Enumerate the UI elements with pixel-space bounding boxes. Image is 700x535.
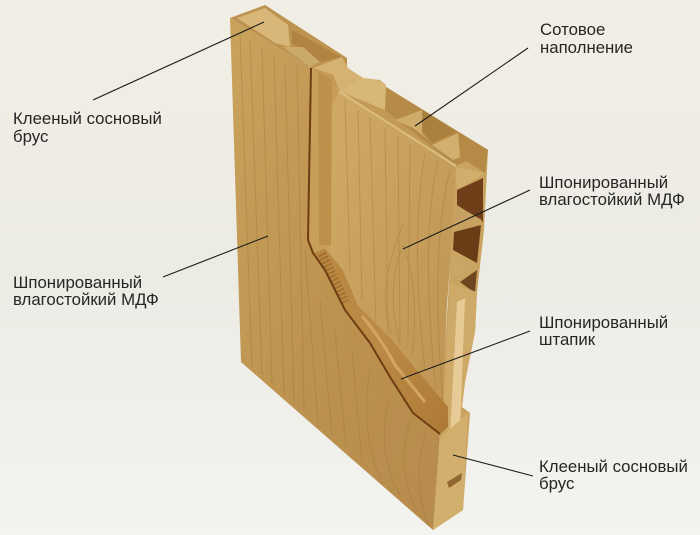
left panel grain [240,35,428,525]
label: honeycomb filling: Сотовое [540,20,605,39]
label: glued pine bar, right: брус [539,474,574,493]
bead highlight [362,316,425,402]
label: veneered MDF, right: Шпонированный [539,173,668,192]
label: veneered MDF, right: влагостойкий МДФ [539,190,685,209]
bead vertical section [308,68,340,253]
door edge: right side [433,133,488,530]
label: glued pine bar, left: Клееный сосновый [13,109,162,128]
door edge base filling [311,68,488,166]
veneered MDF right panel [323,92,456,427]
label: veneered MDF, left: Шпонированный [13,273,142,292]
door cross-section [230,5,488,530]
pine bar side lower [443,283,477,435]
veneered glazing bead [313,248,448,434]
leader lines [93,22,533,476]
upper panel edge highlight [340,92,456,166]
label: veneered MDF, left: влагостойкий МДФ [13,290,159,309]
bead ribbed pine part [322,254,345,302]
label: veneered bead: Шпонированный [539,313,668,332]
label: honeycomb filling: наполнение [540,38,633,57]
honeycomb cells [455,167,485,190]
pine bar connection [313,57,386,110]
dark shadow groove [308,68,440,434]
right panel grain [345,100,450,400]
honeycomb filling top [385,87,488,166]
veneered MDF left panel [230,18,440,530]
label: glued pine bar, right: Клееный сосновый [539,457,688,476]
label: glued pine bar, left: брус [13,127,48,146]
label: veneered bead: штапик [539,330,596,349]
pine bar top [230,5,347,68]
